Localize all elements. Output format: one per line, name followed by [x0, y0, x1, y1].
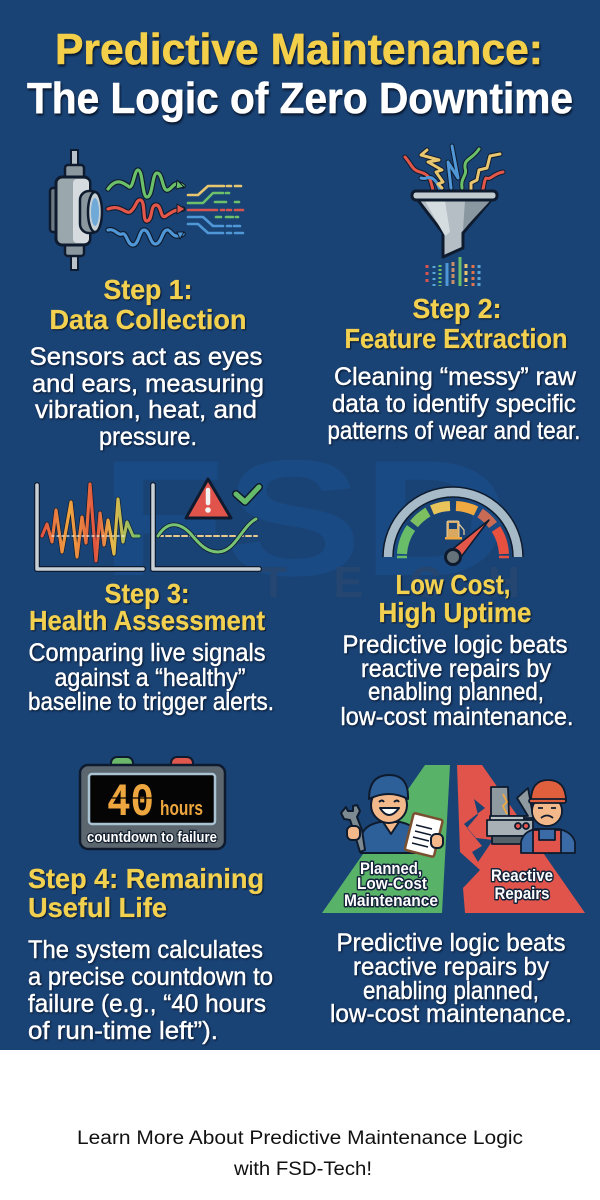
- icon: countdown timer: 40: [107, 777, 154, 829]
- heading: step 4: Step 4: Remaining: [28, 863, 264, 894]
- text: step 3 body: baseline to trigger alerts.: [28, 688, 274, 716]
- heading: step 3: [29, 578, 265, 636]
- icon: countdown timer: hours: [160, 798, 203, 820]
- text: step 3 body: against a “healthy”: [54, 664, 246, 692]
- icon: happy mechanic: [341, 775, 443, 857]
- text: step 1 body: and ears, measuring: [32, 370, 264, 398]
- text: low cost body: low-cost maintenance.: [340, 703, 574, 731]
- heading: low cost: [378, 569, 532, 628]
- text: step 1 body: pressure.: [99, 423, 197, 451]
- watermark: FSD: [100, 426, 510, 610]
- crack: [464, 799, 493, 862]
- heading: low cost: High Uptime: [378, 597, 532, 628]
- text: step 4 body: [28, 936, 273, 1045]
- title: [27, 25, 573, 123]
- text: step 4 body: failure (e.g., “40 hours: [28, 990, 266, 1018]
- icon: sensor with signals: [50, 150, 243, 270]
- icon: fuel pump: [445, 521, 464, 540]
- text: bottom right body: [330, 929, 572, 1028]
- text: step 2 body: [328, 363, 580, 445]
- heading: step 4: [28, 863, 264, 923]
- icon: sad worker: [521, 780, 575, 853]
- heading: step 3: Health Assessment: [29, 605, 265, 636]
- text: low cost body: enabling planned,: [368, 678, 544, 706]
- heading: step 1: Data Collection: [50, 304, 246, 335]
- heading: step 4: Useful Life: [28, 892, 167, 923]
- text: bottom right body: Predictive logic beats: [336, 929, 566, 957]
- text: step 2 body: Cleaning “messy” raw: [334, 363, 577, 391]
- heading: step 2: Step 2:: [412, 293, 502, 324]
- title: Predictive Maintenance:: [55, 25, 543, 74]
- heading: step 2: [344, 293, 568, 354]
- text: step 4 body: The system calculates: [28, 936, 263, 964]
- text: low cost body: Predictive logic beats: [342, 631, 568, 659]
- text: bottom right body: low-cost maintenance.: [330, 1000, 572, 1028]
- text: bottom right body: enabling planned,: [363, 977, 539, 1005]
- panel: planned maintenance: Low-Cost: [357, 874, 427, 893]
- heading: step 1: [50, 274, 246, 335]
- text: step 4 body: a precise countdown to: [28, 963, 273, 991]
- text: low cost body: reactive repairs by: [361, 655, 551, 683]
- heading: step 2: Feature Extraction: [344, 323, 568, 354]
- text: step 1 body: vibration, heat, and: [35, 396, 257, 424]
- icon: broken machine: [487, 787, 533, 844]
- text: step 4 body: of run-time left”).: [28, 1017, 218, 1045]
- footer text: with FSD-Tech!: [233, 1159, 372, 1180]
- text: bottom right body: reactive repairs by: [353, 953, 549, 981]
- chart: baseline with alert: [153, 479, 259, 569]
- text: step 3 body: [28, 639, 274, 716]
- heading: step 1: Step 1:: [104, 274, 192, 305]
- icon: countdown timer: countdown to failure: [87, 829, 217, 846]
- panel: reactive repairs: Reactive: [491, 866, 553, 885]
- icon: countdown timer: [80, 757, 225, 849]
- icon: gauge: [388, 492, 518, 564]
- panel: reactive repairs: [457, 765, 585, 913]
- panel: planned maintenance: Maintenance: [344, 891, 438, 910]
- icon: warning triangle: [186, 479, 231, 518]
- text: step 1 body: [30, 343, 264, 451]
- panel: planned maintenance: [322, 765, 450, 913]
- text: step 3 body: Comparing live signals: [28, 639, 266, 667]
- heading: low cost: Low Cost,: [396, 569, 510, 600]
- watermark: TECH: [260, 558, 520, 607]
- footer text: [77, 1128, 523, 1180]
- footer text: Learn More About Predictive Maintenance Logic: [77, 1128, 523, 1149]
- gauge needle: [446, 520, 489, 564]
- icon: funnel: [405, 146, 503, 286]
- text: step 1 body: Sensors act as eyes: [30, 343, 262, 371]
- text: low cost body: [340, 631, 574, 731]
- panel: planned maintenance: Planned,: [360, 859, 422, 878]
- heading: step 3: Step 3:: [104, 578, 190, 609]
- chart: live signal: [37, 484, 143, 569]
- text: step 2 body: data to identify specific: [332, 390, 576, 418]
- icon: check mark: [236, 487, 259, 502]
- panel: reactive repairs: Repairs: [494, 884, 550, 903]
